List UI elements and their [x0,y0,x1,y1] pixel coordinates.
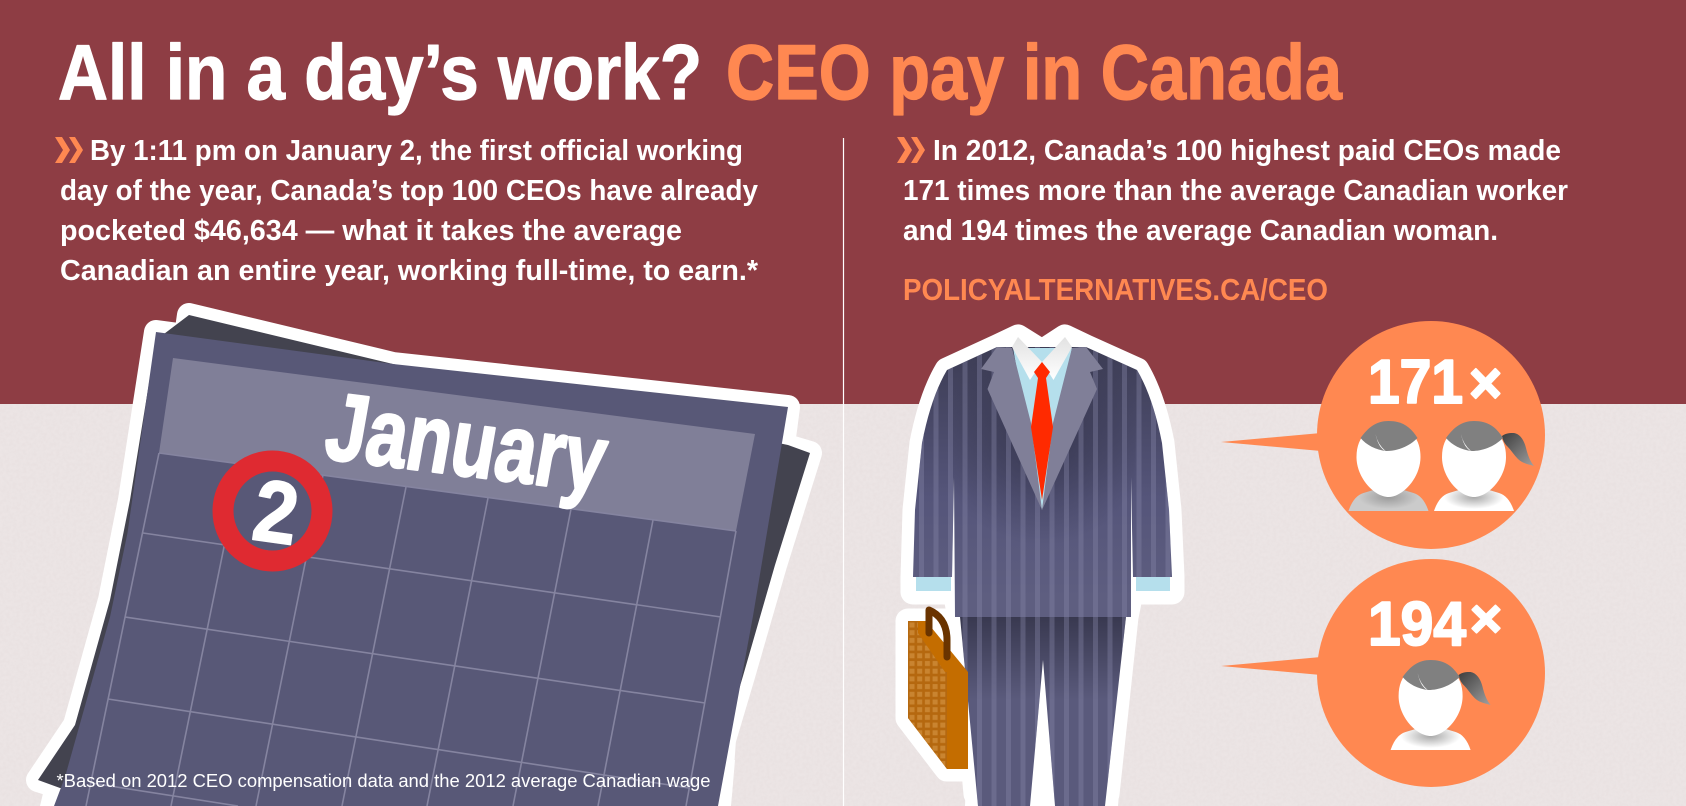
red circle around date [223,461,325,561]
number: 171x: × [1469,351,1502,416]
text block: right intro: 171 times more than the average Canadian worker [903,175,1568,207]
icon: woman [1434,421,1534,511]
calendar back sheet [38,315,810,788]
footnote: *Based on 2012 CEO compensation data and the 2012 average Canadian wage [56,771,710,791]
calendar page [54,332,788,806]
text block: right intro: In 2012, Canada’s 100 highest paid CEOs made [933,135,1561,167]
calendar month label: January [318,373,615,513]
date number: 2 [247,460,305,564]
text block: right intro: and 194 times the average Canadian woman. [903,215,1498,247]
calendar white outline [38,315,810,806]
red tie [1031,362,1053,500]
trousers [960,617,1126,806]
shirt cuffs [916,577,1170,591]
icon: woman [1391,660,1491,750]
calendar month band [159,358,755,531]
text block: left intro: By 1:11 pm on January 2, the first official working [90,135,743,167]
icon: man [1348,421,1428,511]
icon: left chevrons [55,137,83,163]
shirt collar [1012,337,1072,380]
jacket [913,347,1172,617]
icon: right chevrons [897,137,925,163]
text block: left intro: pocketed $46,634 — what it takes the average [60,215,682,247]
text block: left intro: day of the year, Canada’s top 100 CEOs have already [60,175,758,207]
calendar [38,315,810,806]
number: 171x: 171 [1368,348,1463,417]
background: paper [0,404,1686,806]
bubble: 194 [1221,559,1545,787]
text block: left intro: Canadian an entire year, working full-time, to earn.* [60,255,759,287]
number: 194x: 194 [1368,590,1466,659]
text block: right intro [897,135,1568,247]
callout: 194 times [1221,559,1545,787]
briefcase [908,610,968,769]
calendar grid [86,453,736,806]
link: policy alternatives URL: POLICYALTERNATIVES.CA/CEO [903,272,1328,307]
lapels [981,347,1103,510]
title: All in a day’s work? [58,28,702,116]
shirt [1013,348,1072,510]
number: 194x: × [1470,589,1502,649]
background: maroon band [0,0,1686,404]
bubble: 171 [1221,321,1545,549]
title: CEO pay in Canada [726,28,1343,116]
suit figure [908,337,1172,806]
suit white outline [908,337,1172,806]
title [58,28,1343,116]
text block: left intro [55,135,759,287]
callout: 171 times [1221,321,1545,549]
